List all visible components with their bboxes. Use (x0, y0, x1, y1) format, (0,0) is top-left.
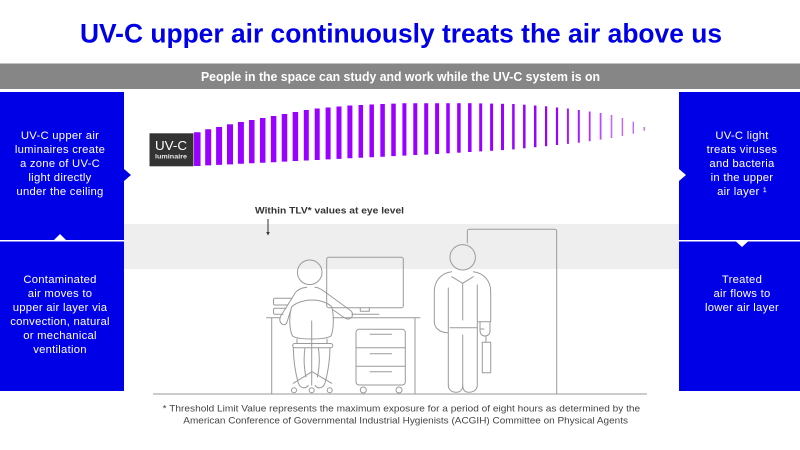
panel: luminaires create zone: under the ceiling (16, 186, 104, 198)
panel: contaminated air: convection, natural (10, 316, 110, 328)
left side of suit (434, 272, 463, 392)
monitor stand (352, 308, 379, 314)
illustration: door (467, 229, 557, 394)
panel: treated air: lower air layer (705, 302, 779, 314)
chair seat (293, 344, 333, 348)
eye level label: Within TLV* values at eye level (255, 206, 404, 216)
subtitle banner: People in the space can study and work while the UV-C system is on (201, 70, 600, 84)
UV-C light beam (197, 103, 644, 166)
panel: contaminated air: upper air layer via (13, 302, 108, 314)
panel: contaminated air: ventilation (33, 344, 87, 356)
books (274, 298, 292, 314)
desk (267, 318, 420, 394)
monitor (327, 257, 403, 308)
panel: light treats viruses: treats viruses (707, 144, 777, 156)
panel: luminaires create zone: light directly (28, 172, 92, 184)
chair back (290, 300, 333, 339)
drawer cabinet (356, 329, 405, 393)
UV-C luminaire (150, 133, 194, 166)
legs (293, 348, 330, 388)
panel: treated air: Treated (722, 274, 762, 286)
arrow: eye level (266, 219, 270, 236)
subtitle banner (0, 64, 800, 89)
panel: light treats viruses: UV-C light (715, 130, 769, 142)
footnote: * Threshold Limit Value represents the maximum exposure for a period of eight hours as determined by the (163, 404, 640, 415)
panel: luminaires create zone: luminaires create (15, 144, 105, 156)
panel: contaminated air (0, 242, 124, 391)
panel: light treats viruses: air layer ¹ (717, 186, 767, 198)
collar, zip and belt (450, 277, 477, 328)
panel: treated air (679, 242, 800, 391)
illustration: seated person at desk (267, 257, 420, 394)
eye level band (124, 224, 679, 269)
chair base and wheels (293, 372, 332, 383)
title: UV-C upper air continuously treats the air above us (80, 18, 722, 48)
arms and shoulders (280, 287, 353, 325)
panel: light treats viruses (679, 92, 800, 240)
panel: luminaires create zone: a zone of UV-C (20, 158, 100, 170)
UV-C luminaire: luminaire (155, 154, 187, 161)
panel: treated air: air flows to (714, 288, 770, 300)
floor line (153, 393, 647, 395)
hand (480, 322, 490, 336)
panel: light treats viruses: in the upper (711, 172, 773, 184)
panel: luminaires create zone: UV-C upper air (21, 130, 99, 142)
panel: contaminated air: or mechanical (23, 330, 97, 342)
chair post (297, 321, 327, 385)
right side of suit (463, 272, 491, 392)
UV-C luminaire: UV-C (155, 138, 187, 153)
head (450, 245, 475, 270)
head (297, 260, 322, 285)
panel: contaminated air: Contaminated (23, 274, 97, 286)
panel: contaminated air: air moves to (28, 288, 92, 300)
briefcase (485, 336, 487, 342)
footnote second line: American Conference of Governmental Industrial Hygienists (ACGIH) Committee on Physical Agents (183, 416, 628, 426)
illustration: standing person (434, 245, 491, 392)
panel: light treats viruses: and bacteria (709, 158, 775, 170)
panel: luminaires create zone (0, 92, 131, 240)
